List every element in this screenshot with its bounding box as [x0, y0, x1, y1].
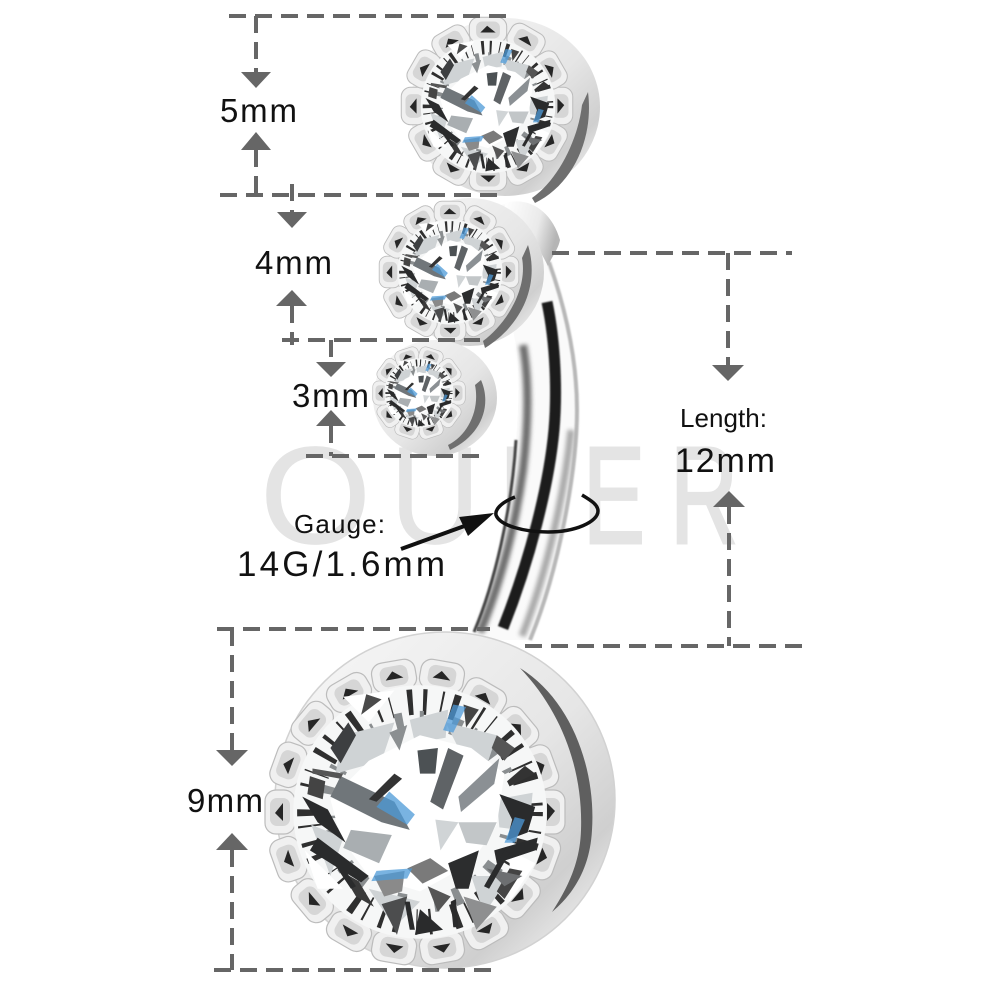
bottom 9mm gem	[265, 632, 615, 968]
label: 3mm: 3mm	[292, 377, 369, 414]
label: 14G/1.6mm: 14G/1.6mm	[237, 545, 445, 584]
watermark: OUFER: U	[390, 419, 480, 573]
watermark: OUFER: R	[670, 419, 738, 573]
5mm groove	[532, 92, 589, 203]
gauge ring	[496, 495, 598, 532]
top 5mm gem	[401, 17, 600, 203]
bar dark reflection	[503, 302, 556, 628]
label: Gauge: Gauge:	[294, 509, 385, 539]
5mm prongs	[401, 17, 573, 191]
bar inner grey band	[522, 430, 571, 636]
4mm groove	[483, 245, 532, 348]
3mm prongs	[373, 345, 465, 441]
small 3mm gem	[373, 340, 497, 456]
3mm stone	[384, 358, 454, 428]
barbell curved bar	[472, 201, 578, 640]
middle 4mm gem	[379, 198, 544, 348]
bar left shading	[480, 345, 528, 632]
4mm setting	[396, 198, 544, 346]
bar top knob	[505, 201, 560, 266]
bar body	[472, 204, 578, 640]
dimension lines	[214, 16, 805, 970]
4mm stone	[398, 220, 502, 324]
bottom gem stone	[293, 685, 547, 939]
watermark: OUFER: F	[499, 419, 566, 573]
label: 5mm: 5mm	[220, 92, 297, 129]
watermark: OUFER: E	[583, 419, 645, 573]
bottom gem metal setting	[275, 632, 615, 968]
setting groove shadow	[520, 668, 592, 912]
bar right shading	[530, 262, 577, 640]
5mm setting	[410, 18, 600, 196]
label: Length: Length:	[680, 403, 767, 433]
label: 4mm: 4mm	[255, 244, 332, 281]
bar left edge	[474, 440, 516, 632]
4mm prongs	[379, 201, 519, 341]
gauge arrow	[401, 513, 494, 549]
label: 12mm: 12mm	[675, 442, 775, 480]
label: 9mm: 9mm	[187, 782, 263, 819]
watermark: OUFER	[260, 419, 738, 573]
3mm setting	[373, 340, 497, 456]
5mm stone	[421, 39, 555, 173]
bezel prongs	[265, 658, 565, 966]
3mm groove	[448, 380, 485, 450]
watermark: OUFER: O	[260, 419, 371, 573]
dimension arrowheads	[216, 72, 745, 850]
